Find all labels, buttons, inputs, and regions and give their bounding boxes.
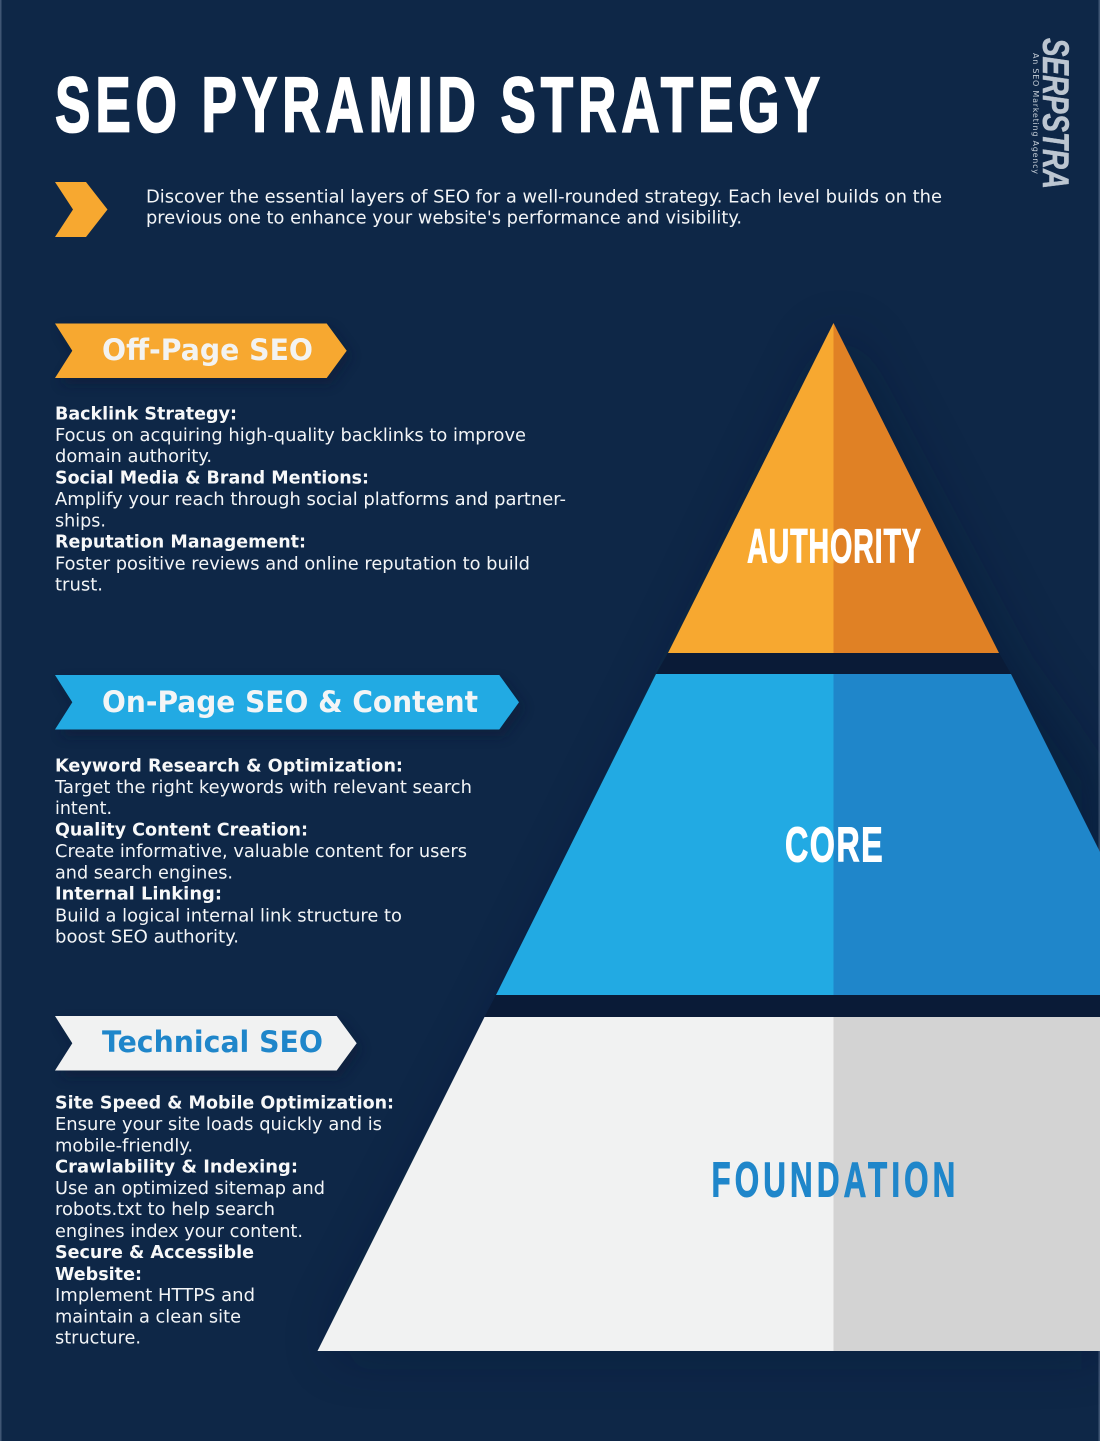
text block: off-page SEO: Social Media & Brand Mentions: (55, 468, 369, 489)
banner: technical SEO (55, 1016, 357, 1070)
text block: technical SEO: structure. (55, 1328, 141, 1349)
banner: off-page SEO: Off-Page SEO (102, 333, 313, 367)
icon: orange chevron (55, 182, 108, 237)
text block: technical SEO: mobile-friendly. (55, 1136, 193, 1156)
text block: on-page SEO and content: Keyword Research & Optimization: (55, 755, 403, 776)
text block: off-page SEO: Amplify your reach through social platforms and partner- (55, 489, 566, 510)
text block: on-page SEO and content: boost SEO authority. (55, 926, 239, 947)
logo: Serpstra: An SEO Marketing Agency (1031, 53, 1040, 174)
text block: technical SEO: engines index your content. (55, 1221, 303, 1242)
text block: technical SEO: Website: (55, 1264, 142, 1285)
pyramid tier: foundation (318, 1017, 1100, 1351)
text block: on-page SEO and content: intent. (55, 798, 112, 819)
text block: technical SEO: Site Speed & Mobile Optimization: (55, 1093, 394, 1114)
text block: on-page SEO and content: Build a logical internal link structure to (55, 905, 402, 926)
text block: technical SEO (55, 1093, 394, 1349)
text block: off-page SEO: Backlink Strategy: (55, 404, 237, 425)
pyramid tier: core: CORE (785, 817, 883, 872)
text block: on-page SEO and content: Quality Content Creation: (55, 820, 308, 841)
pyramid (318, 323, 1100, 1351)
pyramid tier: foundation: FOUNDATION (712, 1153, 955, 1207)
text block: technical SEO: Ensure your site loads quickly and is (55, 1114, 382, 1135)
title: SEO PYRAMID STRATEGY (55, 63, 820, 149)
text block: on-page SEO and content: Target the right keywords with relevant search (54, 777, 472, 798)
panel: on-page SEO and content (54, 675, 524, 947)
text block: on-page SEO and content: Internal Linking: (55, 884, 222, 905)
pyramid tier: authority (668, 323, 999, 653)
text block: on-page SEO and content: Create informative, valuable content for users (55, 841, 467, 862)
text block: off-page SEO (55, 404, 566, 595)
text block: technical SEO: Implement HTTPS and (55, 1285, 255, 1306)
text block: off-page SEO: Foster positive reviews and online reputation to build (55, 553, 530, 574)
banner: on-page SEO and content (55, 675, 519, 730)
text block: off-page SEO: Reputation Management: (55, 532, 306, 553)
text block: technical SEO: Crawlability & Indexing: (55, 1156, 298, 1177)
text block: technical SEO: robots.txt to help search (55, 1199, 275, 1220)
text block: off-page SEO: domain authority. (55, 446, 212, 467)
panel: technical SEO (55, 1016, 394, 1349)
text block: on-page SEO and content (54, 755, 472, 947)
logo: Serpstra: SERPSTRA (1035, 38, 1076, 189)
logo: Serpstra (1031, 38, 1076, 189)
text block: off-page SEO: ships. (55, 511, 106, 532)
text block: off-page SEO: trust. (55, 574, 103, 595)
text block: technical SEO: maintain a clean site (55, 1306, 241, 1328)
text block: technical SEO: Secure & Accessible (55, 1242, 254, 1263)
pyramid tier: authority: AUTHORITY (747, 520, 921, 574)
intro text (146, 187, 942, 228)
intro text: Discover the essential layers of SEO for a well-rounded strategy. Each level builds on the (146, 187, 942, 208)
text block: technical SEO: Use an optimized sitemap and (55, 1178, 325, 1199)
banner: technical SEO: Technical SEO (102, 1025, 323, 1059)
text block: off-page SEO: Focus on acquiring high-quality backlinks to improve (55, 425, 526, 446)
panel: off-page SEO (55, 324, 566, 595)
pyramid tier: core (496, 674, 1100, 995)
banner: off-page SEO (55, 324, 347, 378)
text block: on-page SEO and content: and search engines. (55, 863, 233, 884)
banner: on-page SEO and content: On-Page SEO & Content (102, 685, 478, 719)
intro text: previous one to enhance your website's performance and visibility. (146, 207, 742, 228)
